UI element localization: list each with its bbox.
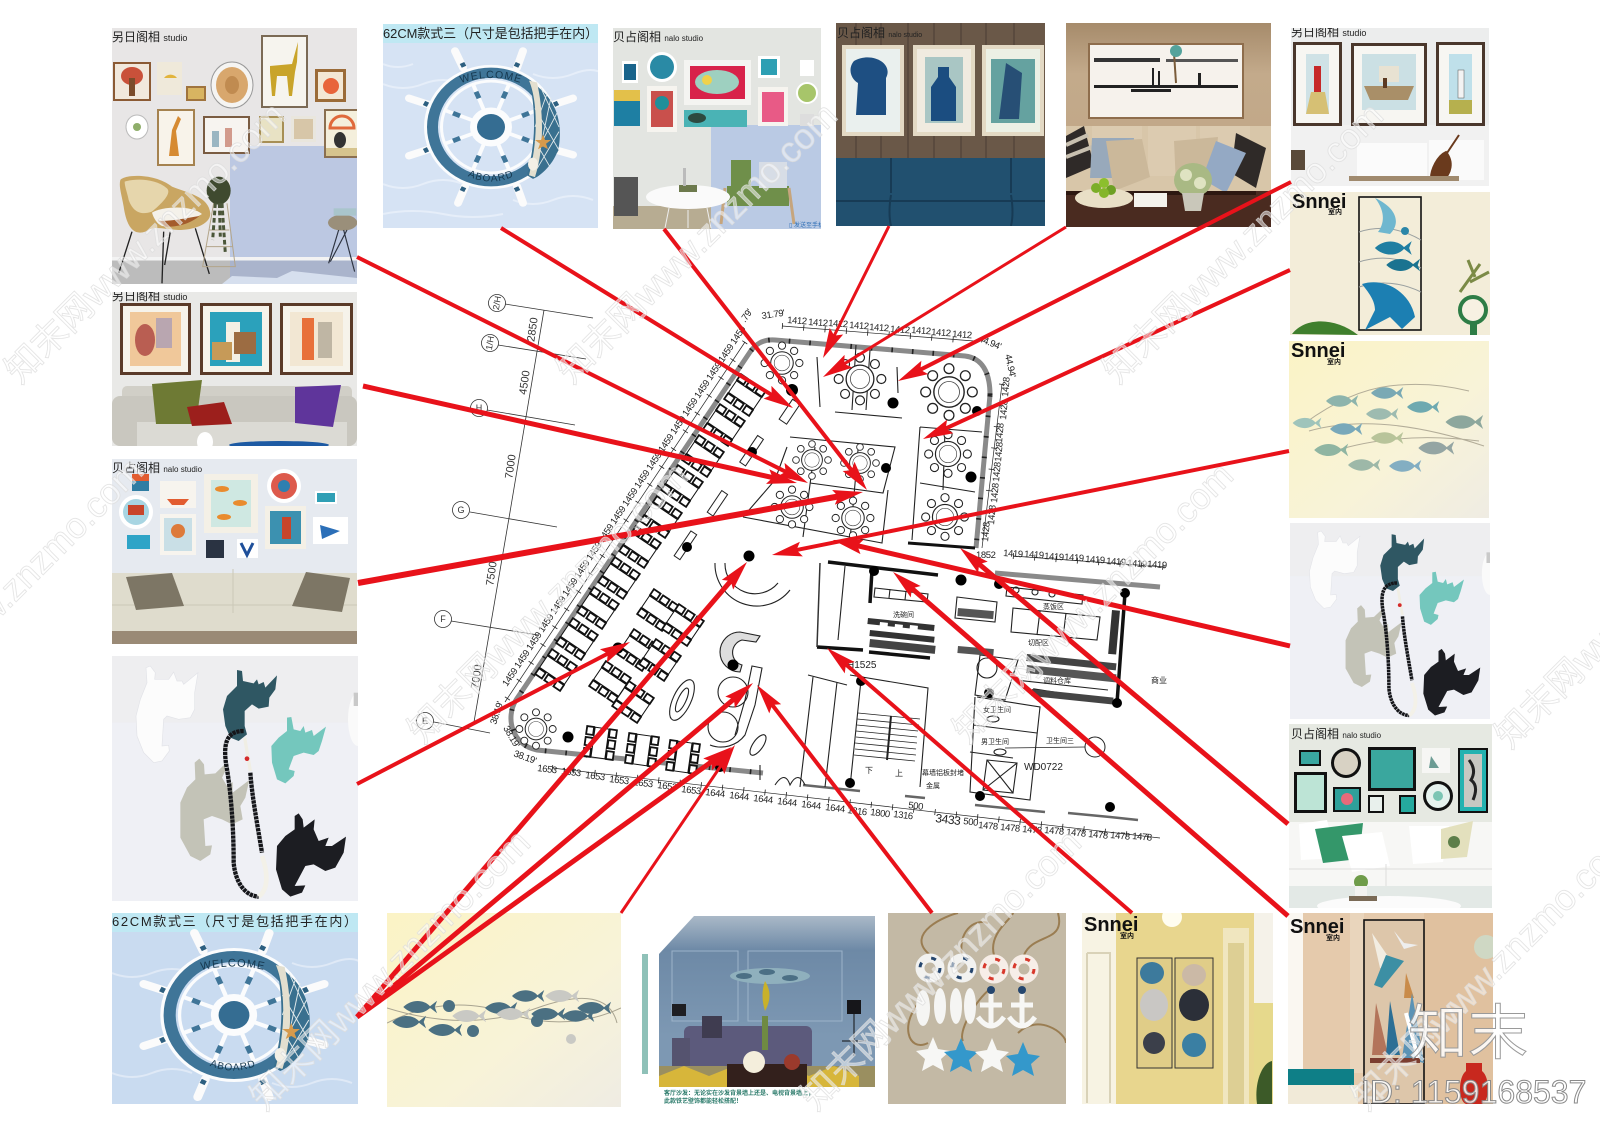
top dimension chain: 1412: [828, 318, 848, 330]
photo: teal gallery over white sofa: [1289, 724, 1492, 908]
rattan stool: [328, 208, 357, 272]
wheel caption: 62CM款式三（尺寸是包括把手在内）: [383, 26, 598, 41]
top dimension chain: 1412: [869, 322, 889, 334]
right dimension chain: 1428: [991, 462, 1004, 482]
diagonal dimension chain: 1459: [644, 450, 664, 473]
bottom dimension chain: 1316: [893, 809, 913, 822]
photo: ship wheel decoration (bottom): [112, 913, 358, 1104]
room labels: 下: [865, 766, 873, 775]
photo: ship wheel decoration (top): [383, 24, 598, 228]
bottom dimension chain: 1478: [1066, 827, 1086, 840]
logo subtitle: 室内: [1327, 357, 1341, 366]
planter racks: [674, 399, 800, 560]
photo: metal fish in tall frame: [1290, 191, 1490, 335]
bottom dimension chain: 1316: [847, 805, 867, 818]
photo: three coastal prints with violin: [1291, 25, 1489, 186]
bottom dimension chain: 1478: [1000, 822, 1020, 835]
arrow: rhino hooks left to plan: [357, 648, 618, 784]
diagonal dimension chain: 1459: [668, 414, 688, 437]
bottom dimension chain: 1644: [801, 799, 821, 812]
room labels: H1525: [847, 660, 877, 671]
arrow: coastal prints to plan: [910, 182, 1291, 375]
room labels: 上: [895, 769, 903, 778]
arrow: bottom wheel to host stand: [357, 692, 742, 1017]
photo: ocean themed gallery over cream sofa: [112, 459, 357, 644]
room labels: 幕墙铝板封堵: [922, 768, 964, 777]
photo: colourful gallery with green armchair: [613, 28, 824, 229]
diagonal dimension chain: 1459: [656, 432, 676, 455]
diagonal dimension chain: 1459: [692, 378, 712, 401]
right dimension chain: 1419: [1127, 558, 1147, 570]
right dimension chain: 1852: [976, 550, 996, 561]
structural columns: [562, 384, 1130, 812]
diagonal dimension chain: [488, 324, 748, 767]
photo: ink landscape over beige sofa: [1066, 23, 1271, 227]
diagonal dimension chain: 1459: [512, 648, 532, 671]
bottom dimension chain: 1653: [657, 780, 677, 793]
logo subtitle: 室内: [1326, 933, 1340, 942]
photo: shell wall art in yellow corridor: [1082, 913, 1273, 1104]
logo subtitle: 室内: [1328, 207, 1342, 216]
diagonal dimension chain: 1459: [680, 396, 700, 419]
photo: metal fish school on cream wall: [1289, 340, 1489, 518]
logo: Snnei: [1084, 914, 1138, 936]
watermarks: 知末网www.znzmo.com: [0, 94, 293, 391]
caption: 客厅沙发：无论实在沙发背景墙上还是、电视背景墙上，: [664, 1089, 814, 1097]
bottom dimension chain: 1653: [537, 763, 557, 776]
top dimension chain: 1412: [911, 325, 931, 337]
bottom dimension chain: 1653: [585, 770, 605, 783]
photo: gallery wall with rattan chair: [112, 28, 357, 284]
room labels: WD0722: [1024, 762, 1063, 773]
room labels: 女卫生间: [983, 705, 1011, 714]
wheel: [409, 51, 573, 203]
diagonal dimension chain: 1459: [584, 540, 604, 563]
grid labels: 7000: [503, 454, 519, 480]
right dimension chain: 1419: [1147, 559, 1167, 571]
grid labels: 2850: [525, 317, 541, 343]
grid labels: [422, 295, 541, 726]
watermarks: 知末网www.znzmo.com: [242, 821, 538, 1118]
right dimension chain: 1428: [998, 400, 1011, 420]
room labels: 蒸饭区: [1043, 602, 1064, 611]
bottom dimension chain: 1653: [633, 777, 653, 790]
grid labels: H: [476, 403, 482, 413]
diagonal dimension chain: 1459: [524, 630, 544, 653]
top dimension chain: 1412: [931, 327, 951, 339]
diagonal dimension chain: 1459: [608, 504, 628, 527]
right dimension chain: [976, 377, 1167, 571]
logo: 贝占阁相 nalo studio: [1291, 726, 1382, 741]
bottom dimension chain: 3433: [935, 811, 962, 828]
logo: 另日阁相 studio: [1291, 25, 1366, 39]
wheel caption: 62CM款式三（尺寸是包括把手在内）: [112, 914, 357, 929]
diagonal dimension chain: 1459: [632, 468, 652, 491]
diagonal dimension chain: 1459: [716, 342, 736, 365]
bottom dimension chain: 1478: [1022, 824, 1042, 837]
photo: rhino hooks (left): [112, 656, 358, 901]
watermarks: 知末网www.znzmo.com: [945, 454, 1241, 751]
bottom dimension chain: 1644: [777, 796, 797, 809]
grid labels: G: [457, 505, 465, 515]
top dimension chain: 44.94': [1002, 353, 1018, 379]
logo: 贝占阁相 nalo studio: [837, 25, 922, 40]
photo: metal fish school on yellow wall: [387, 913, 621, 1107]
top dimension chain: 1412: [952, 329, 972, 341]
diagonal dimension chain: 1459: [728, 324, 748, 347]
right dimension chain: 1428: [980, 522, 993, 542]
right dimension chain: 1419: [1106, 556, 1126, 568]
arrow: metal fish frame to plan: [936, 270, 1290, 433]
brand mark: 知末: [1408, 1000, 1528, 1067]
room labels: 卫生间三: [1046, 736, 1074, 745]
right dimension chain: 1428: [993, 442, 1006, 462]
room labels: 男卫生间: [981, 737, 1009, 746]
dimension ticks: [505, 326, 1165, 838]
logo subtitle: 室内: [1120, 931, 1134, 940]
room labels: 商业: [1151, 675, 1167, 685]
photo: three framed prints on wood wall: [836, 23, 1045, 226]
right dimension chain: 1428: [989, 483, 1002, 503]
dimension lines: [505, 326, 1165, 838]
image id: ID: 1159168537: [1361, 1074, 1586, 1110]
bottom dimension chain: 1644: [705, 787, 725, 800]
wheel lettering: WELCOME: [200, 958, 264, 970]
wall booths: [535, 374, 766, 774]
diagonal dimension chain: 38.19': [512, 748, 538, 767]
arrow: bottom wheel to entry: [357, 755, 721, 1017]
room labels: 切配区: [1028, 639, 1049, 647]
bottom dimension chain: 500: [908, 800, 924, 813]
arrow: fish school bottom to plan: [621, 757, 727, 913]
reception furniture: [665, 563, 805, 785]
top dimension chain: 44.94': [977, 334, 1003, 353]
bottom dimension chain: 500: [963, 816, 979, 829]
diagonal dimension chain: 1459: [560, 576, 580, 599]
climbing plant stand: [203, 177, 235, 267]
bottom dimension chain: 1478: [1110, 830, 1130, 843]
watermarks: 知末网www.znzmo.com: [1095, 94, 1391, 391]
logo: Snnei: [1291, 340, 1345, 362]
bottom dimension chain: [537, 763, 1152, 844]
photo: nautical rope ornaments on linen: [888, 913, 1066, 1104]
arrow: rope ornaments to plan: [766, 696, 932, 913]
right dimension chain: 1428: [1000, 377, 1013, 397]
grid labels: 7000: [469, 664, 485, 690]
watermarks: 知末网www.znzmo.com: [400, 454, 696, 751]
watermarks: 知末网www.znzmo.com: [793, 821, 1089, 1118]
bottom dimension chain: 1653: [681, 784, 701, 797]
logo: Snnei: [1290, 916, 1344, 938]
rattan chair: [119, 176, 210, 283]
logo: 贝占阁相 nalo studio: [613, 29, 704, 44]
room labels: [847, 602, 1167, 790]
interior partitions: [743, 345, 1108, 800]
arrow: seagull art to plan: [904, 581, 1288, 916]
bottom dimension chain: 1644: [729, 790, 749, 803]
note: ▯ 发送至手机: [789, 221, 824, 229]
diagonal dimension chain: 1459: [536, 612, 556, 635]
arrow: wood wall prints to plan: [829, 226, 889, 346]
right dimension chain: 1419: [1044, 551, 1064, 563]
diagonal dimension chain: 1459: [500, 666, 520, 689]
arrow: shell art to plan: [838, 657, 1132, 913]
wheel lettering: WELCOME: [459, 70, 522, 82]
right dimension chain: 1419: [1024, 549, 1044, 561]
diagonal dimension chain: 1459: [620, 486, 640, 509]
photo: seagull and sailboat metal art: [1288, 913, 1493, 1104]
wheel: [144, 933, 324, 1097]
photo: living room with fish wall art: [642, 916, 875, 1105]
grid labels: 2/H: [491, 295, 503, 311]
right dimension chain: 1428: [994, 423, 1007, 443]
arrow: abstract prints to plan: [363, 386, 783, 480]
grid labels: 4500: [517, 370, 533, 396]
arrow: gallery wall to plan: [357, 257, 796, 477]
stairs: [854, 713, 920, 761]
diagonal dimension chain: 38.19': [500, 724, 522, 750]
logo: Snnei: [1292, 191, 1346, 213]
diagonal dimension chain: 1459: [704, 360, 724, 383]
grid axes: [416, 294, 593, 733]
logo: 另日阁相 studio: [112, 289, 187, 303]
exterior walls: [511, 340, 990, 773]
kitchen equipment: [867, 608, 1120, 705]
bottom dimension chain: 1644: [825, 802, 845, 815]
grid labels: 1/H: [484, 335, 496, 351]
top dimension chain: .79': [738, 307, 755, 325]
room labels: 洗碗间: [893, 610, 914, 619]
wheel lettering: ABOARD: [468, 170, 512, 182]
caption: 此款铁艺壁饰都能轻松搭配！: [664, 1097, 742, 1105]
bottom dimension chain: 1644: [753, 793, 773, 806]
top dimension chain: 31.79': [761, 308, 786, 322]
right dimension chain: 1419: [1003, 548, 1023, 560]
top dimension chain: 1412: [849, 320, 869, 332]
room labels: 金属: [926, 781, 940, 790]
photo: three abstract prints over sofa: [112, 289, 357, 446]
red leader arrows: [357, 182, 1291, 1017]
right dimension chain: 1419: [1064, 552, 1084, 564]
diagonal dimension chain: 38.19': [488, 700, 506, 726]
bottom dimension chain: 1653: [609, 774, 629, 787]
logo: 另日阁相 studio: [112, 30, 187, 44]
arrow: colourful gallery to plan: [664, 229, 858, 479]
photo: rhino hooks (right): [1290, 523, 1490, 719]
logo: 贝占阁相 nalo studio: [112, 460, 203, 475]
right dimension chain: 1428: [986, 505, 999, 525]
bottom dimension chain: 1478: [1044, 825, 1064, 838]
bottom dimension chain: 1478: [978, 820, 998, 833]
diagonal dimension chain: 1459: [596, 522, 616, 545]
top dimension chain: 1412: [787, 315, 807, 327]
grid labels: 7500: [484, 561, 500, 587]
top dimension chain: 1412: [890, 324, 910, 336]
arrow: bottom wheel to reception: [357, 573, 738, 1017]
arrow: rhino hooks right to plan: [847, 543, 1290, 646]
wheel lettering: ABOARD: [210, 1060, 254, 1071]
arrow: ink landscape to plan: [835, 227, 1066, 370]
top dimension chain: [738, 307, 1018, 379]
grid labels: F: [440, 614, 446, 624]
floor plan: [416, 294, 1167, 844]
bottom dimension chain: 1653: [561, 766, 581, 779]
room labels: 调料仓库: [1043, 676, 1071, 685]
arrow: top wheel to plan: [501, 228, 781, 401]
arrow: teal gallery to plan: [971, 557, 1288, 824]
right dimension chain: 1419: [1085, 554, 1105, 566]
grid labels: E: [422, 716, 428, 726]
bottom dimension chain: 1478: [1088, 829, 1108, 842]
private room tables: [516, 342, 977, 749]
arrow: metal fish school to plan: [786, 451, 1289, 552]
top dimension chain: 1412: [808, 317, 828, 329]
bottom dimension chain: 1800: [870, 807, 890, 820]
arrow: ocean gallery to plan: [358, 494, 849, 583]
diagonal dimension chain: 1459: [572, 558, 592, 581]
bottom dimension chain: 1478: [1132, 831, 1152, 844]
watermarks: 知末网www.znzmo.com: [549, 94, 845, 391]
diagonal dimension chain: 1459: [548, 594, 568, 617]
